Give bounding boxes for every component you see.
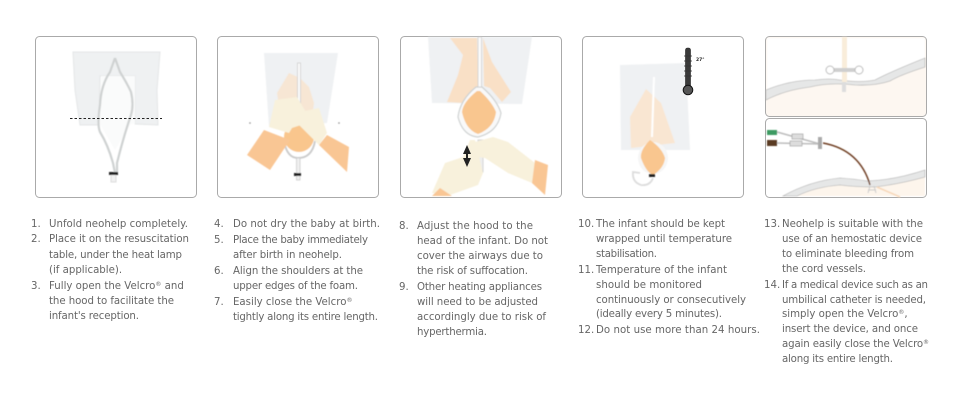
text: steps 4-7: upper edges of the foam.: [233, 281, 358, 292]
icon: thermometer: [683, 48, 705, 95]
text: steps 1-3: 1.: [31, 219, 41, 230]
panel 4: temperature monitoring: [582, 36, 744, 198]
text: steps 13-14: Neohelp is suitable with the: [782, 219, 923, 230]
text: steps 4-7: 4.: [214, 219, 224, 230]
text: steps 13-14: use of an hemostatic device: [782, 234, 922, 245]
text: steps 4-7: tightly along its entire length.: [233, 312, 378, 323]
text: steps 1-3: the hood to facilitate the: [49, 296, 174, 307]
text: steps 4-7: 7.: [214, 297, 224, 308]
text: steps 13-14: simply open the Velcro: [782, 309, 898, 320]
text: steps 4-7: [214, 219, 380, 323]
panel 2: placing baby: [218, 36, 378, 198]
text: steps 8-9: 8.: [399, 221, 409, 232]
text: steps 8-9: Other heating appliances: [417, 282, 542, 293]
text: steps 10-12: (ideally every 5 minutes).: [596, 309, 722, 320]
dashed fold line: [70, 118, 162, 120]
text: steps 1-3: (if applicable).: [49, 265, 122, 276]
text: steps 8-9: 9.: [399, 282, 409, 293]
text: steps 13-14: umbilical catheter is needed,: [782, 295, 926, 306]
icon: bag with hands: [247, 53, 349, 180]
inset: umbilical clamp: [766, 36, 926, 116]
text: steps 8-9: hyperthermia.: [417, 327, 487, 338]
text: steps 1-3: Place it on the resuscitation: [49, 234, 189, 245]
panel 5: devices: [766, 36, 926, 198]
text: steps 13-14: ,: [904, 309, 908, 320]
text: steps 10-12: 11.: [578, 265, 594, 276]
icon: unfolded bag: [73, 52, 160, 182]
text: steps 4-7: 5.: [214, 235, 224, 246]
text: steps 10-12: The infant should be kept: [595, 219, 725, 230]
icon: double arrow: [463, 145, 471, 167]
text: steps 10-12: Do not use more than 24 hours.: [596, 325, 760, 336]
text: steps 10-12: stabilisation.: [596, 249, 657, 260]
text: steps 1-3: Fully open the Velcro: [49, 281, 155, 292]
text: steps 8-9: head of the infant. Do not: [417, 236, 548, 247]
text: steps 8-9: the risk of suffocation.: [417, 266, 528, 277]
text: steps 10-12: wrapped until temperature: [596, 234, 732, 245]
text: steps 13-14: again easily close the Velcro: [782, 339, 923, 350]
text: steps 10-12: 10.: [578, 219, 594, 230]
text: steps 1-3: table, under the heat lamp: [49, 250, 182, 261]
icon: hood adjustment with hands: [428, 37, 548, 196]
text: steps 13-14: ®: [898, 309, 904, 316]
text: steps 4-7: Place the baby immediately: [233, 235, 368, 246]
text: steps 13-14: insert the device, and once: [782, 324, 918, 335]
text: steps 4-7: Easily close the Velcro: [233, 297, 346, 308]
text: steps 4-7: Do not dry the baby at birth.: [233, 219, 380, 230]
text: steps 10-12: Temperature of the infant: [595, 265, 727, 276]
icon: wrapped infant: [620, 63, 690, 185]
text: steps 8-9: cover the airways due to: [417, 251, 543, 262]
text: steps 13-14: the cord vessels.: [782, 264, 866, 275]
text: steps 1-3: ®: [155, 281, 161, 288]
panel 1: unfolded neohelp: [36, 36, 196, 198]
text: steps 8-9: will need to be adjusted: [417, 297, 538, 308]
text: steps 10-12: should be monitored: [596, 280, 702, 291]
text: steps 13-14: to eliminate bleeding from: [782, 249, 914, 260]
text: steps 1-3: and: [161, 281, 184, 292]
text: steps 4-7: ®: [346, 297, 352, 304]
text: steps 8-9: accordingly due to risk of: [417, 312, 546, 323]
text: steps 1-3: [31, 219, 189, 322]
text: steps 4-7: Align the shoulders at the: [233, 266, 363, 277]
text: steps 13-14: 13.: [764, 219, 780, 230]
text: steps 4-7: 6.: [214, 266, 224, 277]
text: steps 1-3: 3.: [31, 281, 41, 292]
text: steps 13-14: [764, 219, 929, 365]
inset: umbilical catheter: [766, 118, 926, 198]
panel 3: adjusting hood: [400, 36, 562, 198]
text: steps 10-12: 12.: [578, 325, 594, 336]
text: steps 13-14: ®: [923, 339, 929, 346]
text: steps 13-14: 14.: [764, 280, 780, 291]
text: steps 10-12: [578, 219, 760, 336]
text: steps 13-14: along its entire length.: [782, 354, 893, 365]
text: steps 1-3: infant's reception.: [49, 311, 139, 322]
text: steps 4-7: after birth in neohelp.: [233, 250, 342, 261]
icon: thermometer: 27°: [696, 57, 705, 63]
text: steps 1-3: 2.: [31, 234, 41, 245]
text: steps 10-12: continuously or consecutively: [596, 295, 746, 306]
text: steps 13-14: If a medical device such as an: [782, 280, 928, 291]
text: steps 1-3: Unfold neohelp completely.: [49, 219, 188, 230]
text: steps 8-9: [399, 221, 548, 338]
text: steps 8-9: Adjust the hood to the: [417, 221, 533, 232]
